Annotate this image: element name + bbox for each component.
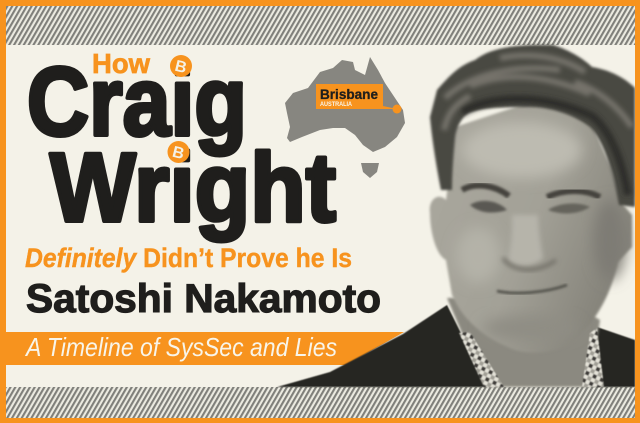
mouth [497, 285, 567, 293]
forehead highlight [462, 122, 582, 178]
nose shadow [503, 258, 556, 270]
mainland [285, 57, 405, 152]
heading word: Craig: Craig [27, 47, 247, 156]
heading word: Wright: Wright [50, 133, 336, 242]
subtitle banner: A Timeline of SysSec and Lies [24, 332, 337, 362]
top stripe band [6, 6, 635, 45]
icon: bitcoin coin lower: B [170, 144, 186, 163]
bottom stripe band [6, 387, 635, 418]
subheading: Definitely Didn't Prove he Is: Definitely Didn’t Prove he Is [25, 243, 352, 273]
left eyebrow [462, 185, 509, 196]
Brisbane label tag [316, 84, 402, 114]
left eye [470, 201, 507, 213]
Brisbane label tag: AUSTRALIA [320, 102, 353, 108]
Brisbane label tag: Brisbane [320, 86, 378, 102]
right eye [548, 204, 590, 213]
face [430, 100, 632, 353]
heading word: How: How [92, 48, 150, 79]
icon: bitcoin coin top: B [173, 58, 188, 77]
shirt collar right [582, 328, 604, 387]
right eyebrow [547, 191, 600, 197]
jaw shade [482, 316, 578, 340]
neck [447, 296, 600, 387]
Tasmania [361, 163, 379, 178]
portrait photo [277, 45, 635, 387]
hair dark roots [462, 99, 628, 195]
jacket [277, 305, 635, 387]
nose bridge light [508, 215, 543, 266]
map of Australia [285, 57, 405, 178]
subheading: Satoshi Nakamoto: Satoshi Nakamoto [26, 277, 381, 321]
icon: bitcoin coin top [170, 55, 192, 77]
left cheek highlight [456, 227, 500, 283]
shirt collar left [459, 332, 504, 387]
right cheek shade [594, 200, 626, 280]
icon: bitcoin coin lower [168, 141, 190, 163]
hair soft strands [444, 55, 632, 130]
hair base [430, 45, 635, 207]
